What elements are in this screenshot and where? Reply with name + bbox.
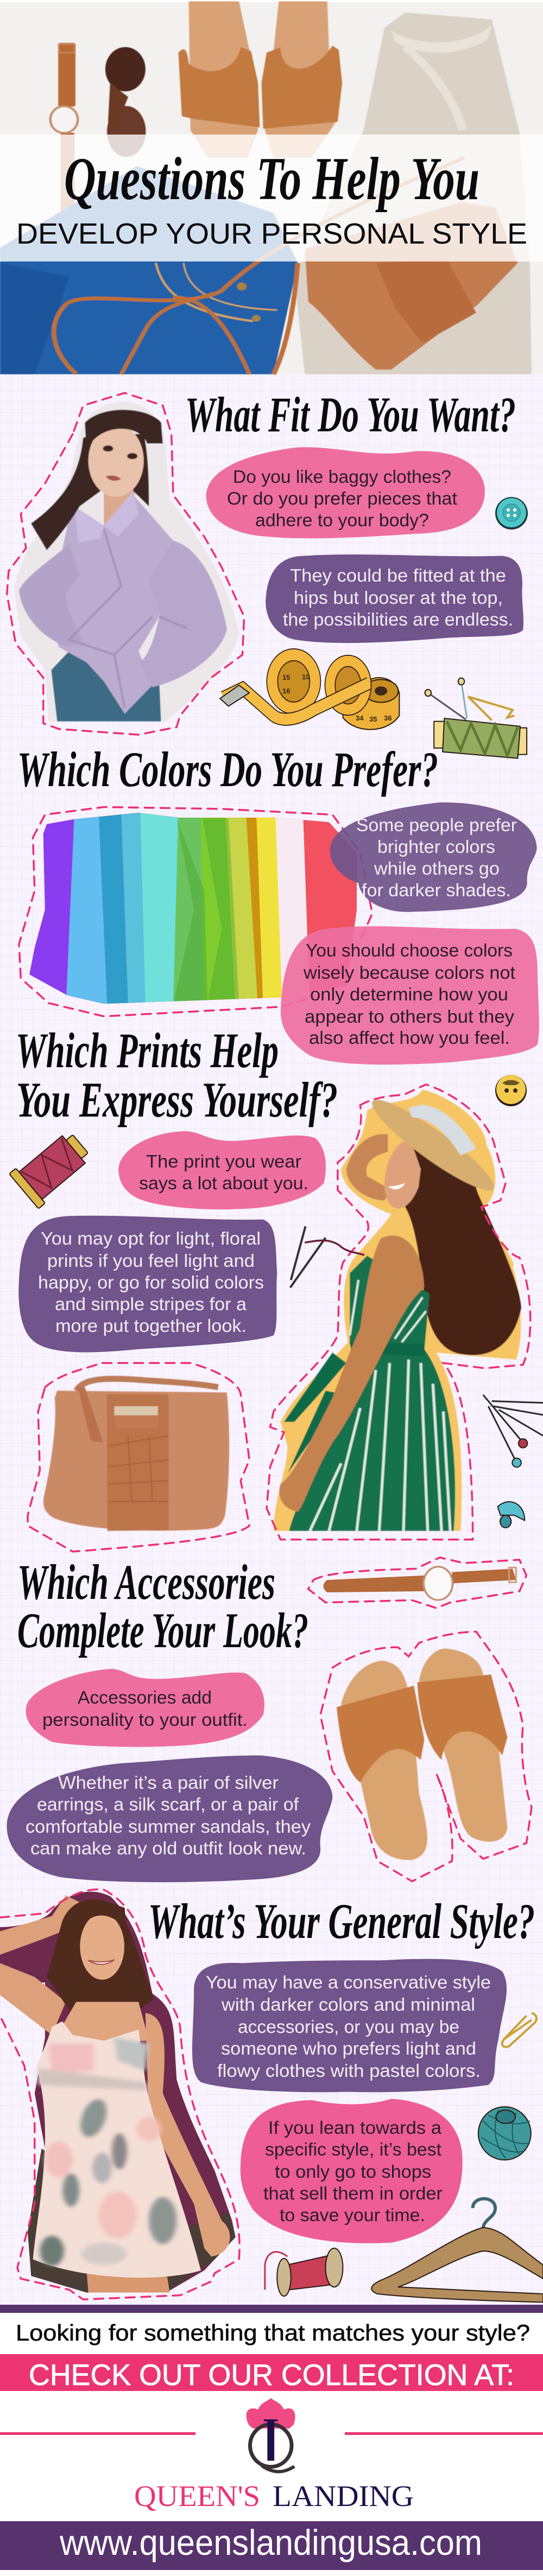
question line: Looking for something that matches your style? <box>16 2320 530 2345</box>
callout: conservative style: flowy clothes with pastel colors. <box>217 2061 481 2081</box>
photo: woman in green striped dress <box>274 1089 521 1531</box>
heading: which prints <box>16 1023 338 1127</box>
photo: tan leather handbag <box>43 1379 229 1531</box>
callout: light floral prints: more put together look. <box>55 1316 247 1336</box>
callout: brighter colors: while others go <box>374 858 500 878</box>
callout: choose colors wisely: You should choose colors <box>306 940 513 960</box>
callout: accessories add personality: Accessories add <box>78 1687 212 1707</box>
section 3: which prints <box>9 1023 543 1552</box>
title band <box>0 135 543 262</box>
callout: brighter colors: for darker shades. <box>362 880 511 900</box>
logo: wordmark: LANDING <box>273 2479 414 2513</box>
icon: tape measure <box>220 655 399 730</box>
callout: choose colors wisely: wisely because colors not <box>303 962 515 983</box>
photo: rainbow of fabrics <box>29 813 357 1004</box>
callout: silver earrings: comfortable summer sandals, they <box>26 1816 311 1837</box>
icon: needles and thread <box>290 1226 364 1287</box>
callout: brighter colors: brighter colors <box>377 837 495 857</box>
callout: choose colors wisely: appear to others but they <box>305 1006 515 1026</box>
callout: light floral prints <box>18 1216 277 1352</box>
icon: green spool with pins <box>425 678 527 758</box>
callout: lean towards a specific style: to only go to shops <box>275 2161 431 2182</box>
icon: tape measure: 36 <box>384 714 392 722</box>
callout: lean towards a specific style <box>241 2099 463 2243</box>
logo: crown and Q monogram <box>247 2398 295 2472</box>
callout: the print you wear <box>118 1131 326 1209</box>
callout: silver earrings: Whether it’s a pair of silver <box>58 1772 279 1793</box>
icon: tape measure: 10 <box>302 673 310 681</box>
callout: brighter colors <box>330 802 537 912</box>
heading: which prints: Which Prints Help <box>16 1023 279 1078</box>
icon: wooden clothes hanger <box>371 2199 543 2302</box>
callout: fitted at the hips: They could be fitted at the <box>290 565 506 585</box>
dashed outline: watch <box>308 1558 526 1608</box>
callout: accessories add personality: personality to your outfit. <box>42 1710 248 1730</box>
callout: light floral prints: prints if you feel light and <box>47 1251 255 1271</box>
icon: safety pin <box>502 2013 536 2047</box>
pink banner: CHECK OUT OUR COLLECTION AT: <box>29 2358 514 2392</box>
callout: brighter colors: Some people prefer <box>356 815 517 835</box>
callout: conservative style: accessories, or you may be <box>238 2017 459 2037</box>
section 4: which accessories <box>7 1554 532 1882</box>
photo: wrist watch <box>324 1566 516 1601</box>
logo: wordmark <box>134 2479 414 2513</box>
dashed outline: sandals <box>320 1632 532 1882</box>
heading: which accessories: Complete Your Look? <box>17 1603 308 1658</box>
title: subtitle: DEVELOP YOUR PERSONAL STYLE <box>16 218 527 250</box>
callout: fitted at the hips: the possibilities are endless. <box>283 609 513 629</box>
photo: tan sandals <box>337 1648 507 1860</box>
callout: choose colors wisely: only determine how you <box>310 984 508 1004</box>
logo: wordmark: QUEEN'S <box>134 2479 260 2513</box>
photo: woman in floral dress <box>0 1892 236 2293</box>
callout: light floral prints: You may opt for light, floral <box>41 1228 261 1248</box>
heading: which prints: You Express Yourself? <box>16 1072 338 1127</box>
callout: fitted at the hips <box>266 554 523 643</box>
callout: light floral prints: and simple stripes for a <box>55 1294 247 1314</box>
website banner: www.queenslandingusa.com <box>59 2522 482 2562</box>
callout: conservative style <box>192 1959 507 2092</box>
icon: tape measure: 34 <box>356 714 364 722</box>
icon: red thread spool <box>9 1126 95 1209</box>
dashed outline: rainbow fabrics <box>19 807 372 1016</box>
icon: teal button <box>495 497 528 530</box>
callout: accessories add personality <box>26 1669 264 1747</box>
icon: tape measure: 35 <box>369 715 377 723</box>
callout: choose colors wisely <box>281 926 539 1064</box>
callout: conservative style: with darker colors and minimal <box>221 1994 475 2014</box>
heading: which accessories: Which Accessories <box>17 1554 275 1610</box>
icon: teal thimble <box>498 1502 525 1528</box>
icon: teal yarn ball <box>478 2107 531 2160</box>
callout: conservative style: someone who prefers light and <box>221 2038 476 2058</box>
page background with grid <box>0 374 543 2306</box>
callout: lean towards a specific style: to save your time. <box>280 2205 425 2225</box>
website banner <box>0 2521 543 2570</box>
callout: silver earrings: earrings, a silk scarf, or a pair of <box>37 1794 299 1814</box>
callout: silver earrings <box>7 1755 332 1882</box>
dashed outline: woman in dress <box>267 1085 531 1540</box>
section 1: what fit do you want <box>7 387 528 758</box>
callout: the print you wear: The print you wear <box>146 1151 301 1171</box>
icon: tape measure: 16 <box>282 687 290 695</box>
hero photo: flat lay of clothes and accessories <box>0 0 543 374</box>
callout: light floral prints: happy, or go for solid colors <box>38 1272 264 1292</box>
footer <box>0 2313 543 2576</box>
callout: lean towards a specific style: If you lean towards a <box>268 2118 442 2138</box>
dashed outline: woman <box>7 393 244 735</box>
icon: yellow button <box>495 1075 527 1106</box>
callout: baggy clothes: Or do you prefer pieces that <box>227 488 457 508</box>
callout: fitted at the hips: hips but looser at the top, <box>294 588 503 608</box>
photo: woman in lavender shirt <box>14 401 239 722</box>
callout: baggy clothes: adhere to your body? <box>255 510 429 530</box>
callout: lean towards a specific style: specific style, it’s best <box>265 2139 441 2159</box>
dashed outline: woman in floral dress <box>0 1889 239 2299</box>
callout: silver earrings: can make any old outfit look new. <box>30 1838 306 1858</box>
callout: baggy clothes: Do you like baggy clothes? <box>233 467 451 487</box>
icon: sewing pins <box>483 1395 543 1467</box>
callout: lean towards a specific style: that sell them in order <box>263 2183 443 2203</box>
purple divider bar <box>0 2305 543 2313</box>
icon: red spool of thread <box>265 2248 343 2296</box>
heading: which accessories <box>17 1554 308 1658</box>
callout: choose colors wisely: also affect how you feel. <box>309 1028 510 1048</box>
callout: conservative style: You may have a conservative style <box>206 1972 491 1992</box>
dashed outline: handbag <box>28 1363 249 1552</box>
section 5: what's your general style <box>0 1889 543 2302</box>
callout: baggy clothes <box>206 447 485 538</box>
section 2: which colors do you prefer <box>17 742 539 1064</box>
callout: the print you wear: says a lot about you. <box>139 1173 308 1193</box>
icon: tape measure: 15 <box>282 673 290 681</box>
